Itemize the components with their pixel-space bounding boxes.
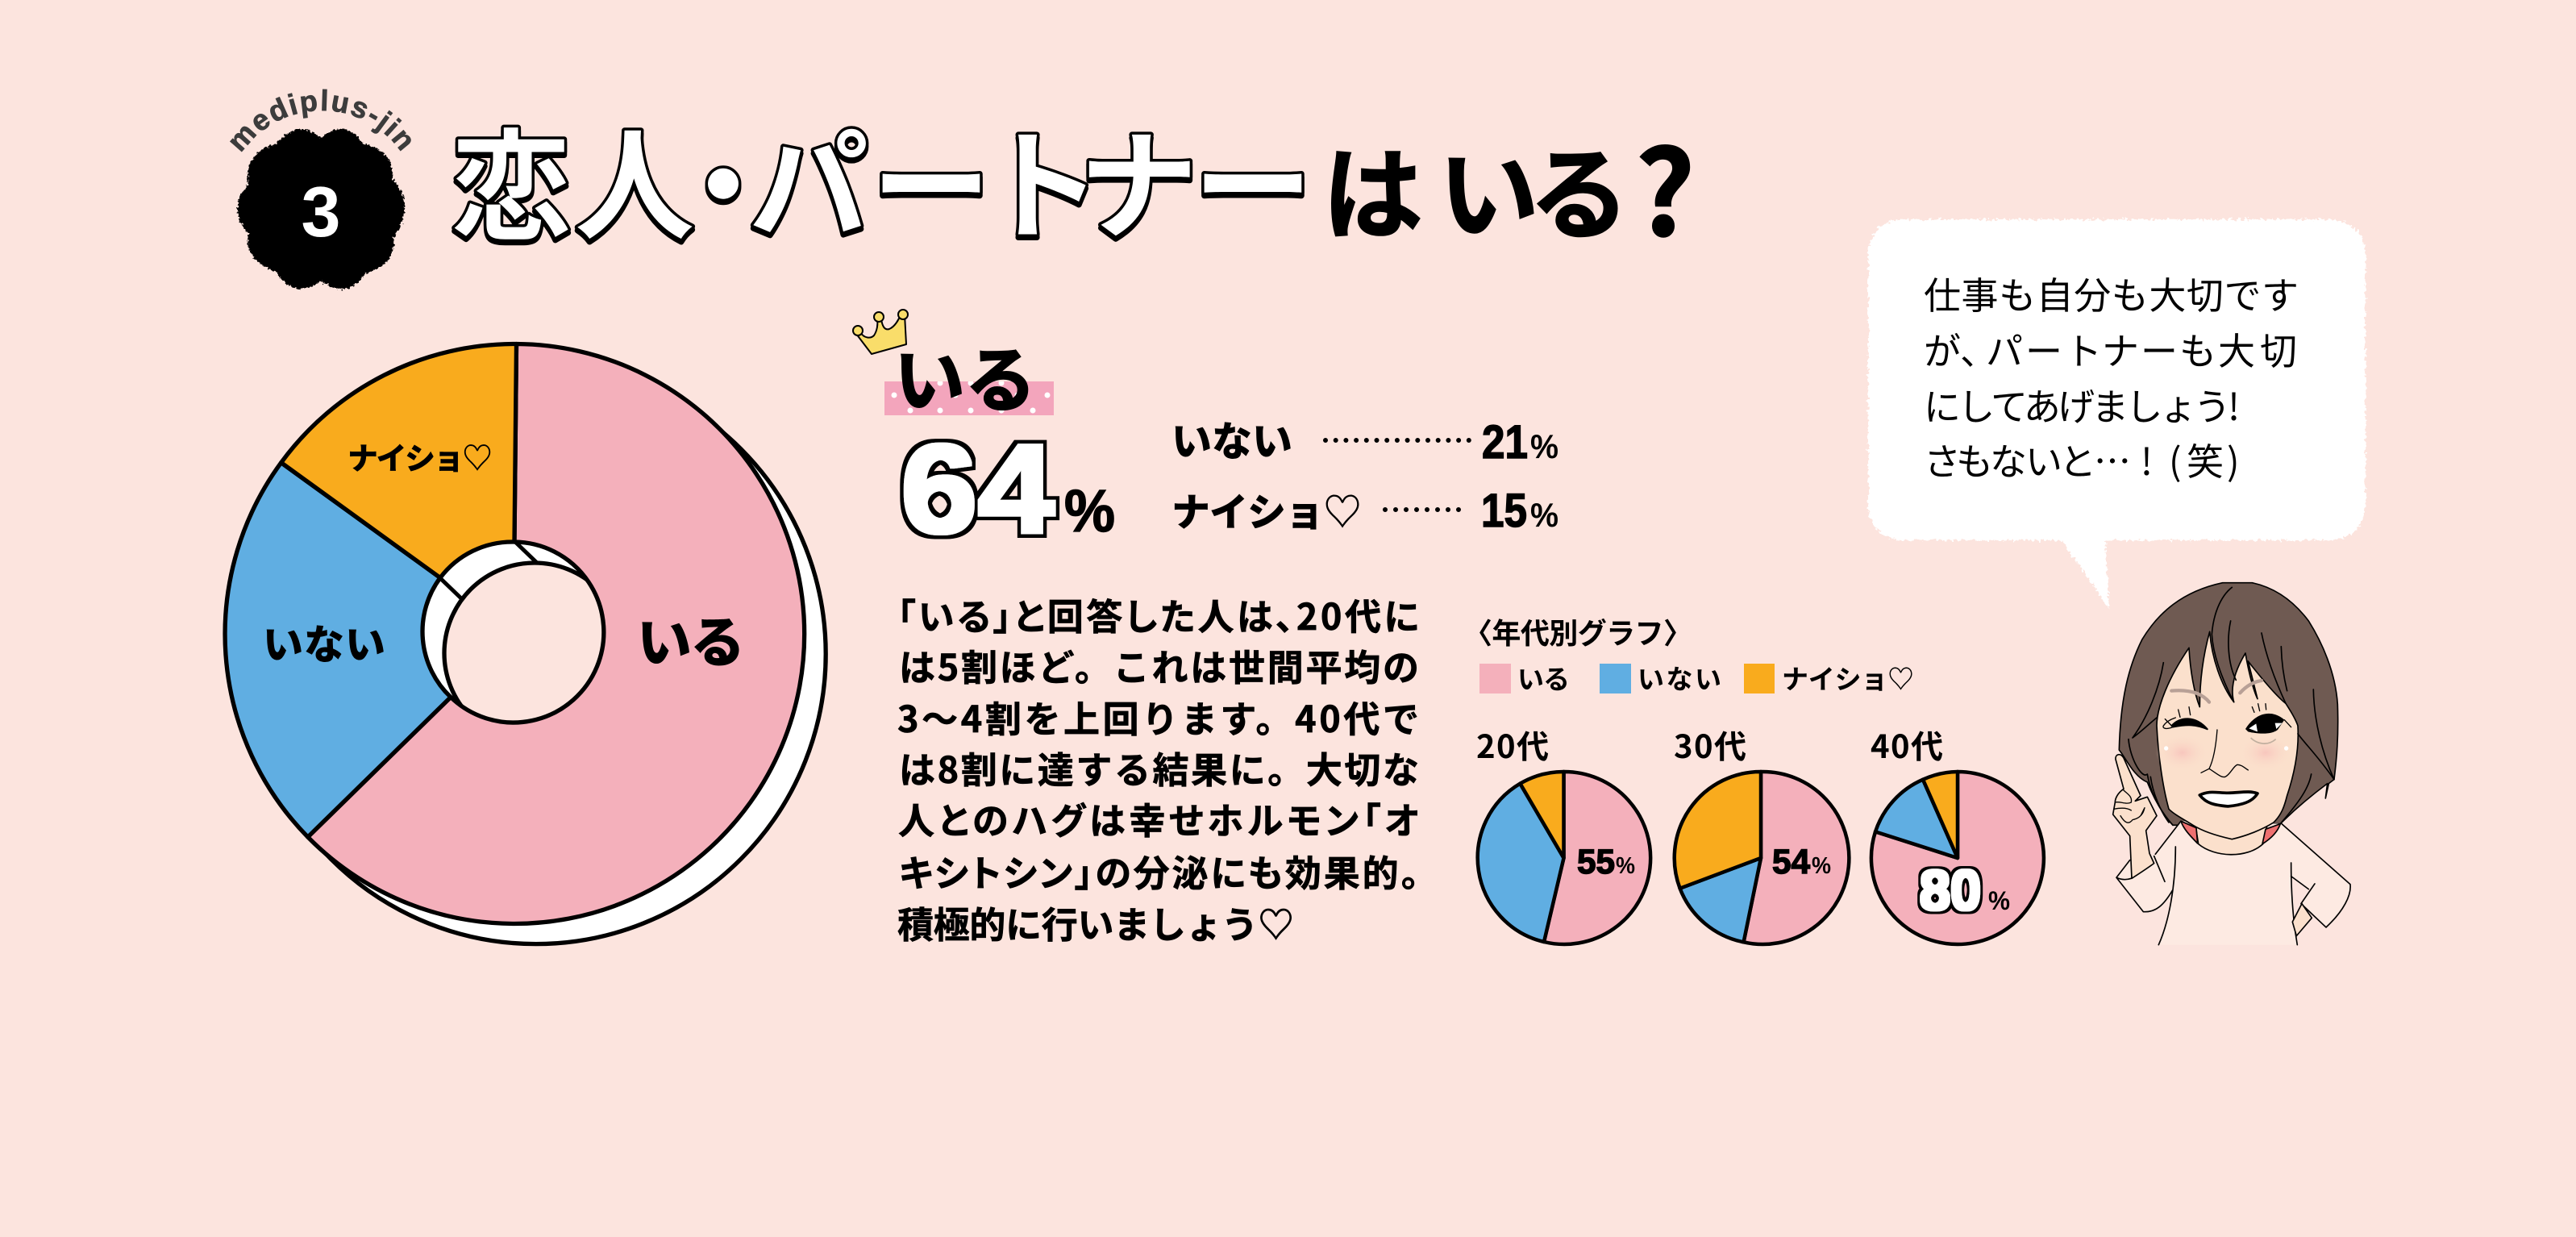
pie: 30代: 54 [1772, 843, 1810, 881]
main donut chart [225, 344, 826, 944]
age graph legend [1463, 610, 1914, 697]
legend: いる [1479, 658, 1570, 697]
row: ナイショ: % [1530, 496, 1559, 534]
pie: 40代: 80 [1920, 859, 1981, 922]
hair [2119, 583, 2338, 825]
bubble text: さもないと…!(笑) [1924, 433, 2240, 486]
pie: 20代: 20代 [1476, 721, 1549, 768]
pie: 40代: 40代 [1871, 721, 1943, 768]
segment: ナイショ [281, 344, 516, 577]
segment: いない [225, 463, 451, 837]
body [2116, 821, 2350, 945]
donut shadow ring [246, 364, 826, 944]
polka dot tape [884, 381, 1054, 415]
legend: いる: いる [1517, 658, 1570, 697]
nose [2201, 730, 2248, 777]
pie: 40代 [1871, 721, 2044, 944]
row: いない [1171, 410, 1559, 469]
pie: 20代: 55 [1577, 843, 1615, 881]
top result [853, 310, 1115, 560]
body paragraph: キシトシン」の分泌にも効果的。 [899, 844, 1419, 897]
neck [2195, 827, 2267, 855]
pie: 40代: % [1988, 886, 2010, 915]
pie: 30代: 30代 [1674, 721, 1746, 768]
eyebrows [2171, 690, 2209, 702]
badge number: 3 [302, 172, 340, 252]
result value 64: 64 [901, 419, 1055, 560]
other results list [1171, 410, 1559, 537]
section badge: mediplus-jin [230, 89, 411, 152]
title outlined part: 恋人・パートナー [452, 90, 1313, 264]
pie: 30代: % [1812, 853, 1831, 879]
body paragraph: は5割ほど。これは世間平均の [899, 639, 1419, 691]
brand arc text [225, 110, 418, 207]
icon: crown [853, 310, 908, 354]
waist gap and hand [2292, 904, 2312, 936]
mouth [2199, 792, 2258, 806]
collar [2181, 821, 2198, 843]
bubble text: にしてあげましょう! [1924, 378, 2240, 431]
bubble text: が、パートナーも大切 [1924, 323, 2297, 376]
legend: いない: いない [1638, 658, 1721, 697]
bubble shape [1868, 219, 2366, 609]
title [452, 90, 1696, 269]
label: ナイショ: ナイショ♡ [347, 434, 493, 478]
body paragraph [897, 588, 1419, 948]
label: いる: いる [637, 598, 745, 678]
row: ナイショ: 15 [1481, 485, 1527, 537]
body paragraph: 3〜4割を上回ります。40代で [897, 690, 1419, 743]
body paragraph: 人とのハグは幸せホルモン「オ [898, 792, 1419, 844]
winking eye [2171, 718, 2208, 730]
row: ナイショ [1171, 481, 1559, 537]
legend heading: 〈年代別グラフ〉 [1463, 610, 1692, 652]
connector lines [440, 541, 536, 598]
result label: いる [894, 324, 1036, 427]
bubble text [1924, 267, 2299, 486]
label: いない: いない [263, 613, 385, 671]
body paragraph: 積極的に行いましょう♡ [897, 896, 1294, 948]
pie: 20代: % [1616, 853, 1635, 879]
badge blob [237, 129, 405, 289]
arm and hand [2113, 755, 2157, 878]
finger lines [2114, 789, 2145, 823]
blush [2155, 734, 2209, 772]
speech bubble [1868, 219, 2366, 609]
row: ナイショ: ナイショ♡ [1171, 481, 1362, 537]
pie: 20代 [1476, 721, 1650, 944]
legend: ナイショ: ナイショ♡ [1782, 658, 1914, 697]
section badge [230, 89, 411, 290]
body outline [2116, 821, 2350, 945]
segment: いる [308, 344, 805, 923]
body paragraph: 「いる」と回答した人は、20代に [897, 588, 1419, 640]
row: いない: 21 [1482, 416, 1528, 469]
face [2157, 631, 2298, 839]
title solid part: ? [1635, 100, 1696, 269]
body paragraph: は8割に達する結果に。大切な [899, 741, 1419, 793]
character illustration [2113, 583, 2350, 945]
title solid part: はいる [1322, 114, 1629, 260]
result percent: % [1064, 477, 1115, 544]
pie: 30代 [1674, 721, 1849, 944]
legend: いない [1600, 658, 1721, 697]
row: いない: いない [1171, 410, 1292, 468]
open eye [2245, 714, 2284, 734]
row: いない: % [1530, 427, 1559, 465]
bubble text: 仕事も自分も大切です [1924, 267, 2299, 320]
hair strands [2129, 587, 2334, 825]
